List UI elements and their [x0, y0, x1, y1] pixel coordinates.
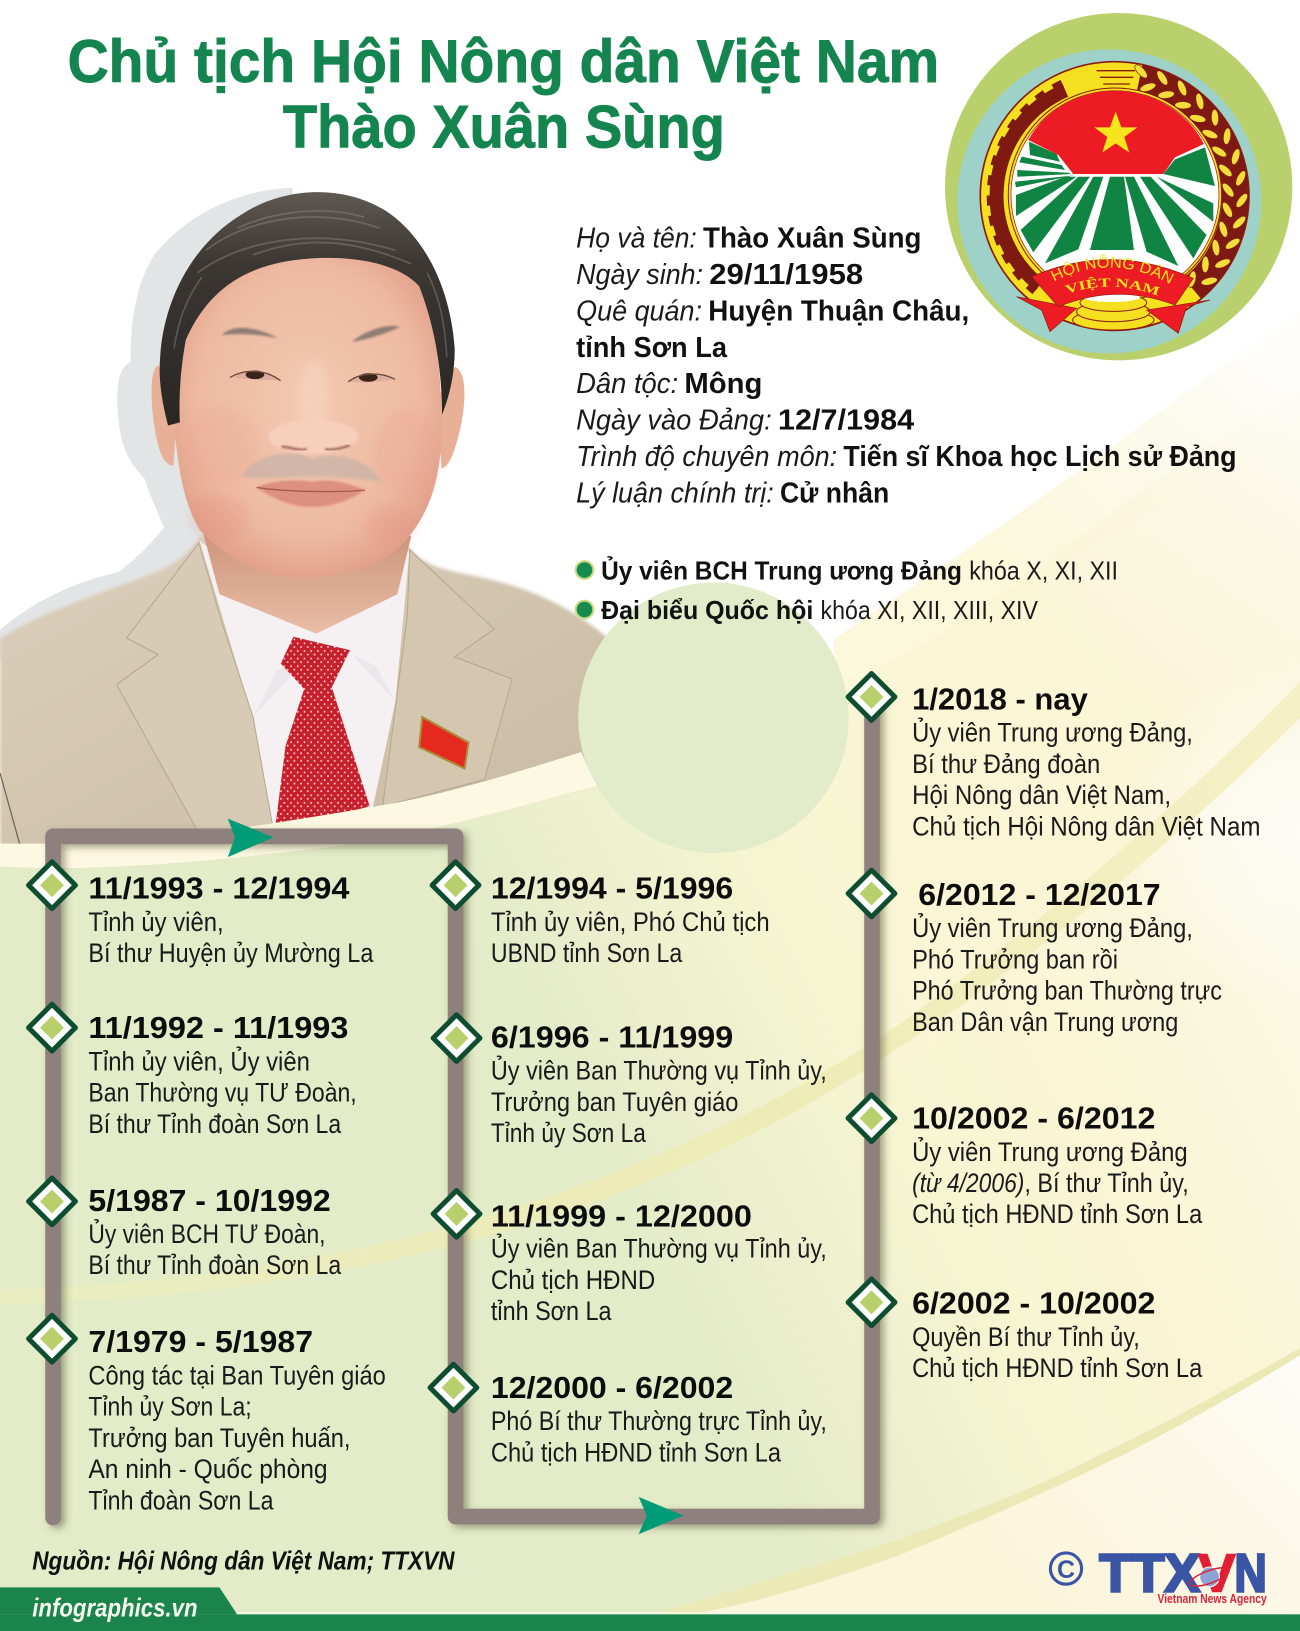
timeline entry 6/2012: Ủy viên Trung ương Đảng, [912, 913, 1193, 943]
tie [275, 637, 370, 831]
background: light green field [0, 416, 1300, 1631]
timeline entry 6/2002: Quyền Bí thư Tỉnh ủy, [912, 1322, 1140, 1352]
timeline entry 6/2012: Phó Trưởng ban Thường trực [912, 976, 1222, 1006]
personal information: Huyện Thuận Châu, [708, 295, 969, 327]
timeline entry 6/2012: Ban Dân vận Trung ương [912, 1007, 1178, 1037]
timeline entry 12/1994: 12/1994 - 5/1996 [491, 871, 733, 906]
personal information: Dân tộc: [576, 368, 678, 400]
timeline entry 1/2018: Chủ tịch Hội Nông dân Việt Nam [912, 811, 1260, 841]
personal information: 12/7/1984 [778, 405, 914, 437]
collar shadow [253, 655, 395, 717]
timeline entry 11/1992: Bí thư Tỉnh đoàn Sơn La [88, 1109, 341, 1139]
portrait: face [152, 256, 464, 578]
emblem: Hội Nông dân Việt Nam [944, 13, 1292, 360]
timeline entry 1/2018 [848, 674, 1260, 841]
emblem red sky [1028, 91, 1204, 174]
bullet: National Assembly deputy: Đại biểu Quốc hội [601, 595, 813, 625]
timeline entry 5/1987 [29, 1178, 341, 1280]
timeline entry 1/2018: 1/2018 - nay [912, 681, 1088, 716]
timeline entry 7/1979: Công tác tại Ban Tuyên giáo [88, 1360, 386, 1390]
timeline entry 11/1999 [433, 1190, 827, 1326]
personal information: Mông [684, 368, 762, 400]
portrait silhouette shadow [0, 188, 293, 661]
emblem ribbon [1016, 254, 1210, 334]
emblem ring [980, 62, 1250, 330]
logo: TTXVN: C [1057, 1556, 1075, 1584]
personal information: Cử nhân [780, 477, 889, 509]
timeline entry 7/1979: An ninh - Quốc phòng [88, 1454, 328, 1484]
timeline path [53, 697, 872, 1518]
timeline entry 6/1996: Trưởng ban Tuyên giáo [491, 1087, 738, 1117]
logo: TTXVN: Vietnam News Agency [1158, 1591, 1267, 1606]
timeline entry 11/1993 [29, 862, 374, 968]
background: long swoosh [0, 681, 1300, 1304]
timeline entry 11/1992: Ban Thường vụ TƯ Đoàn, [88, 1078, 357, 1108]
timeline entry 6/2012 [848, 870, 1222, 1037]
emblem backing circles [945, 13, 1292, 360]
background: cream lower right area [686, 1355, 1300, 1614]
timeline entry 11/1999: Ủy viên Ban Thường vụ Tỉnh ủy, [491, 1234, 827, 1264]
timeline entry 1/2018: Bí thư Đảng đoàn [912, 749, 1100, 779]
arrow: top [228, 819, 274, 857]
timeline entry 10/2002: 10/2002 - 6/2012 [912, 1101, 1155, 1136]
personal information: tỉnh Sơn La [576, 332, 728, 364]
timeline entry 5/1987: 5/1987 - 10/1992 [88, 1183, 331, 1218]
logo: TTXVN: TTX [1099, 1543, 1200, 1603]
timeline entry 1/2018: Ủy viên Trung ương Đảng, [912, 718, 1193, 748]
timeline entry 12/2000: 12/2000 - 6/2002 [491, 1370, 733, 1405]
ears [152, 365, 464, 468]
timeline entry 10/2002: (từ 4/2006) [912, 1168, 1024, 1198]
timeline entry 6/2002 [848, 1279, 1202, 1383]
timeline entry 12/1994: UBND tỉnh Sơn La [491, 938, 682, 968]
logo: TTXVN [1050, 1543, 1267, 1606]
emblem ribbon: HỘI NÔNG DÂN [1050, 254, 1174, 284]
timeline entry 7/1979: Trưởng ban Tuyên huấn, [88, 1423, 350, 1453]
timeline entry 11/1993: Bí thư Huyện ủy Mường La [88, 938, 374, 968]
personal information: Ngày vào Đảng: [576, 405, 772, 437]
personal information: Lý luận chính trị: [576, 477, 774, 509]
timeline entry 6/1996: Tỉnh ủy Sơn La [491, 1118, 646, 1148]
timeline entry 6/2002: Chủ tịch HĐND tỉnh Sơn La [912, 1353, 1202, 1383]
timeline entry 12/2000: Chủ tịch HĐND tỉnh Sơn La [491, 1437, 781, 1467]
background: light green circle [578, 582, 849, 853]
timeline entry 7/1979: 7/1979 - 5/1987 [88, 1324, 313, 1359]
background: second sweep band [876, 390, 1300, 1631]
personal information: Thào Xuân Sùng [703, 223, 921, 255]
personal information: Quê quán: [576, 295, 702, 327]
personal information: Trình độ chuyên môn: [576, 441, 837, 473]
title: Thào Xuân Sùng [283, 93, 725, 161]
timeline entry 11/1992: Tỉnh ủy viên, Ủy viên [88, 1046, 310, 1076]
timeline entry 6/2002: 6/2002 - 10/2002 [912, 1286, 1155, 1321]
jacket front edge [0, 773, 20, 844]
timeline entry 11/1992 [29, 1004, 357, 1139]
timeline entry 5/1987: Bí thư Tỉnh đoàn Sơn La [88, 1250, 341, 1280]
timeline entry 6/2012: Phó Trưởng ban rồi [912, 944, 1118, 974]
timeline entry 6/1996: Ủy viên Ban Thường vụ Tỉnh ủy, [491, 1056, 827, 1086]
emblem ribbon: VIỆT NAM [1064, 276, 1160, 296]
background: light area under swoosh [1092, 655, 1300, 1009]
title: Chủ tịch Hội Nông dân Việt Nam [68, 27, 939, 95]
personal information [576, 223, 1237, 509]
timeline entry 11/1999: 11/1999 - 12/2000 [491, 1198, 752, 1233]
source line: Nguồn: Hội Nông dân Việt Nam; TTXVN [32, 1546, 456, 1576]
logo: TTXVN: V [1198, 1543, 1236, 1603]
timeline entry 6/1996: 6/1996 - 11/1999 [491, 1019, 733, 1054]
bullet: National Assembly deputy [575, 595, 1038, 625]
personal information: Họ và tên: [576, 223, 697, 255]
timeline entry 11/1999: Chủ tịch HĐND [491, 1265, 655, 1295]
background: cream band over suit [0, 752, 595, 868]
emblem gold base [1073, 293, 1154, 330]
timeline entry 11/1993: 11/1993 - 12/1994 [88, 871, 349, 906]
shirt [200, 541, 410, 826]
face shape [175, 256, 442, 578]
left lapel [117, 543, 274, 849]
background: lower swoosh [653, 1348, 1300, 1614]
party pin [419, 717, 469, 768]
bullet: National Assembly deputy: khóa XI, XII, XIII, XIV [821, 595, 1038, 625]
personal information: Ngày sinh: [576, 259, 703, 291]
bullet: Central Committee membership: Ủy viên BCH Trung ương Đảng [601, 554, 962, 585]
timeline entry 6/2012: 6/2012 - 12/2017 [918, 877, 1161, 912]
timeline entry 12/1994 [432, 862, 770, 968]
timeline entry 11/1999: tỉnh Sơn La [491, 1296, 612, 1326]
timeline entry 6/1996 [433, 1015, 827, 1148]
timeline entry 1/2018: Hội Nông dân Việt Nam, [912, 780, 1171, 810]
bullet: Central Committee membership [575, 554, 1118, 585]
arrow: bottom [639, 1497, 683, 1534]
timeline entry 12/2000 [430, 1364, 827, 1467]
timeline entry 7/1979: Tỉnh ủy Sơn La; [88, 1392, 252, 1422]
right lapel [383, 550, 512, 806]
timeline entry 11/1992: 11/1992 - 11/1993 [88, 1010, 348, 1045]
title [68, 27, 939, 161]
footer bar: infographics.vn [32, 1592, 198, 1622]
timeline entry 10/2002: Ủy viên Trung ương Đảng [912, 1137, 1188, 1167]
personal information: Tiến sĩ Khoa học Lịch sử Đảng [843, 441, 1237, 473]
timeline entry 12/1994: Tỉnh ủy viên, Phó Chủ tịch [491, 907, 770, 937]
background: upper sweep layer over field [876, 390, 1300, 1092]
timeline entry 12/2000: Phó Bí thư Thường trực Tỉnh ủy, [491, 1406, 827, 1436]
personal information: 29/11/1958 [709, 259, 863, 291]
neck [202, 518, 411, 634]
timeline entry 11/1993: Tỉnh ủy viên, [88, 907, 224, 937]
emblem star [1094, 112, 1137, 153]
portrait: facial features [183, 326, 440, 543]
footer bar [0, 1587, 1300, 1631]
timeline entry 7/1979 [29, 1315, 386, 1515]
timeline entry 10/2002 [848, 1095, 1202, 1229]
portrait: hair [160, 192, 455, 425]
portrait: suit and shirt [0, 518, 609, 870]
timeline entry 5/1987: Ủy viên BCH TƯ Đoàn, [88, 1219, 326, 1249]
timeline entry 7/1979: Tỉnh đoàn Sơn La [88, 1485, 274, 1515]
background: cream sweep [834, 312, 1300, 1631]
suit jacket [0, 536, 609, 870]
logo: TTXVN: N [1234, 1543, 1267, 1603]
emblem fields [1015, 142, 1215, 266]
bullet: Central Committee membership: khóa X, XI, XII [969, 555, 1118, 585]
timeline entry 10/2002: , Bí thư Tỉnh ủy, [1024, 1168, 1189, 1198]
timeline entry 10/2002: Chủ tịch HĐND tỉnh Sơn La [912, 1199, 1202, 1229]
